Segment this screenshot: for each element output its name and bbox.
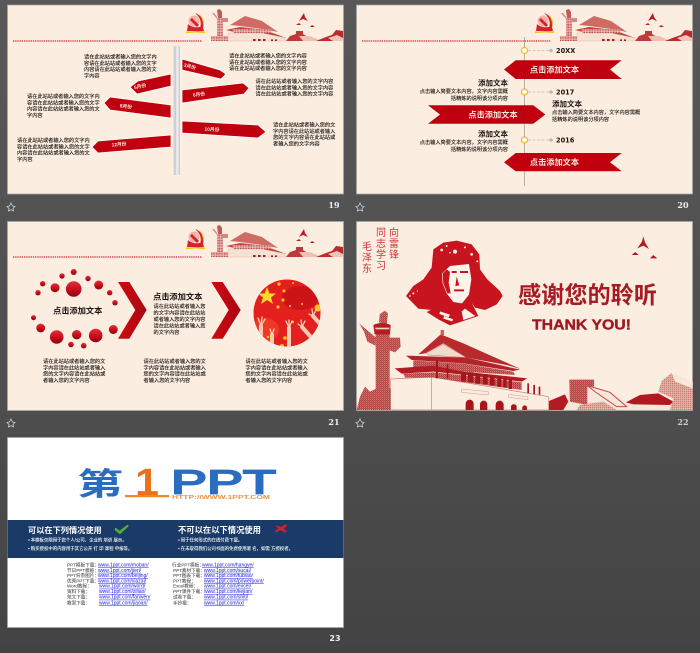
- text block: lower right: 请在此站站或者输入您的文: [273, 120, 336, 128]
- text block: right: 点击输入简要文本内容，文字内容需概: [552, 108, 640, 116]
- text block: lower left: 容请在此站站或者输入您的文字: [17, 142, 90, 150]
- sign: May: [130, 74, 171, 94]
- thank you title: 感谢您的聆听: [518, 282, 657, 308]
- links column left: [67, 562, 151, 606]
- bottom text block 1: 请在此站站或者输入您的文: [43, 357, 106, 365]
- bottom text block 3: [246, 357, 309, 384]
- slide 22 page number: 22: [677, 417, 689, 427]
- text block: left upper: [420, 78, 508, 102]
- links column right: www.1ppt.com/tubiao/: [204, 573, 254, 579]
- allowed list: [28, 536, 132, 552]
- text block: left lower: 点击输入简要文本内容，文字内容需概: [420, 138, 508, 146]
- milestone 2017: [522, 88, 575, 96]
- timeline axis: [524, 37, 526, 186]
- links column left: 教案下载：: [67, 599, 90, 606]
- links column right: www.1ppt.com/sucai/: [204, 568, 252, 574]
- text block: middle left: [27, 92, 100, 119]
- sign: August: 8月份: [119, 102, 133, 111]
- links column right: www.1ppt.com/hangye/: [202, 562, 254, 568]
- sign: December: [92, 135, 171, 153]
- slide 22 page number: [356, 417, 689, 427]
- ring caption: 点击添加文本: [53, 306, 102, 316]
- forbidden heading: 不可以在以下情况使用: [178, 525, 261, 535]
- links column right: www.1ppt.com/kejian/: [204, 589, 253, 595]
- middle text block: 的文字内容: [154, 328, 179, 336]
- links column right: www.1ppt.com/powerpoint/: [204, 578, 264, 584]
- text block: middle left: 内容请在此站站或者输入您的文: [27, 105, 100, 113]
- ribbon 3: [504, 153, 622, 171]
- links column left: Word教程：: [67, 583, 92, 590]
- links column right: [172, 562, 264, 606]
- text block: lower right: 字内容请在此站站或者输入: [273, 127, 335, 135]
- text block: left lower: 括精炼的说明该分项内容: [451, 145, 508, 153]
- allowed heading: 可以在下列情况使用: [28, 525, 102, 535]
- calligraphy: 东: [362, 262, 372, 275]
- text block: lower left: 请在此站站或者输入您的文字内: [17, 136, 90, 144]
- dotted circle ring: [31, 269, 118, 349]
- header banner: [13, 9, 343, 41]
- links column right: PPT课件下载：: [173, 588, 205, 595]
- sign: March: 3月份: [183, 62, 197, 71]
- text block: right: [552, 98, 640, 123]
- slide 23: usage terms: [8, 438, 344, 628]
- milestone 2016: [522, 136, 575, 144]
- middle text block: [154, 302, 205, 336]
- text block: upper right: 请在此站站或者输入您的文字内容: [229, 58, 307, 66]
- calligraphy: [362, 226, 399, 275]
- middle heading: 点击添加文本: [153, 292, 202, 302]
- logo: 1: [135, 462, 159, 504]
- slide 19: signpost: [8, 5, 344, 194]
- text block: upper left: 请在此站站或者输入您的文字内: [84, 52, 157, 60]
- bottom text block 3: 您的文字内容请在此站站或: [246, 370, 308, 378]
- text block: middle right: 请在此站站或者输入您的文字内容: [256, 77, 333, 85]
- birds: [632, 236, 657, 258]
- sign: October: [182, 121, 266, 138]
- text block: upper right: 请在此站站或者输入您的文字内容: [229, 52, 307, 60]
- middle text block: 请在此站站或者输入您: [154, 302, 205, 310]
- middle text block: 请在此站站或者输入您: [154, 322, 205, 330]
- links column left: www.1ppt.com/moban/: [98, 562, 149, 568]
- links column left: www.1ppt.com/ziliao/: [99, 589, 146, 595]
- bottom text block 2: 者输入您的文字内容: [144, 376, 190, 384]
- text block: left upper: 添加文本: [478, 78, 508, 88]
- text block: middle right: [256, 77, 333, 98]
- links column left: www.1ppt.com/xiazai/: [98, 578, 147, 584]
- slide 20: timeline: [356, 5, 692, 194]
- flag photo circle: [251, 279, 322, 348]
- milestone 2017: 2017: [556, 88, 575, 96]
- slide 23 page number: 23: [329, 634, 341, 643]
- bottom text block 3: 者输入您的文字内容: [246, 376, 292, 384]
- navy band: [8, 520, 344, 558]
- logo: [77, 462, 276, 504]
- bottom text block 1: 字内容请在此站站或者输入: [43, 363, 105, 371]
- links column right: PPT教程：: [173, 577, 196, 584]
- links column left: PPT模板下载：: [67, 562, 99, 568]
- bottom text block 2: [144, 357, 207, 384]
- links column right: Excel教程：: [173, 583, 198, 590]
- text block: lower right: 者输入您的文字内容: [273, 139, 320, 147]
- slide 21 page number: 21: [328, 417, 340, 427]
- sign: March: [182, 59, 226, 79]
- links column left: 范文下载：: [67, 594, 90, 601]
- signpost pole: [173, 46, 180, 175]
- links column right: 手抄报：: [173, 599, 191, 606]
- text block: right: 添加文本: [552, 98, 582, 108]
- text block: upper left: 内容请在此站站或者输入您的文: [84, 65, 157, 73]
- logo: 第: [77, 467, 123, 502]
- thank you subtitle: THANK YOU!: [532, 318, 631, 334]
- text block: lower left: [17, 136, 90, 163]
- slide 20 page number: 20: [677, 200, 689, 210]
- links column right: 试卷下载：: [173, 594, 196, 601]
- text block: middle right: 请在此站站或者输入您的文字内容: [256, 83, 333, 91]
- arrow: chevron 1: [118, 282, 147, 339]
- links column left: www.1ppt.com/beijing/: [98, 573, 148, 579]
- bottom text block 1: [43, 357, 106, 384]
- sign: August: [104, 97, 171, 118]
- milestone 20XX: 20XX: [556, 47, 575, 55]
- text block: middle right: 请在此站站或者输入您的文字内容: [256, 90, 333, 98]
- portrait silhouette: [406, 241, 503, 325]
- text block: lower right: 您的文字内容请在此站站或: [273, 133, 335, 141]
- forbidden list: ▪ 在未取得我们公司书面的免费使用署 名，如需 方授权者。: [178, 545, 293, 552]
- allowed list: ▪ 本模板仅限用于您个人/公司、企业的 培训 展示。: [28, 536, 127, 544]
- calligraphy: 锋: [389, 248, 399, 261]
- calligraphy: 毛: [362, 241, 372, 253]
- middle text block: 或者输入您的文字内容: [154, 315, 205, 323]
- text block: upper left: 字内容: [84, 71, 100, 79]
- calligraphy: 同: [376, 227, 386, 239]
- bottom text block 3: 请在此站站或者输入您的文: [246, 357, 309, 365]
- sign: May: 5月份: [133, 82, 147, 91]
- links column left: PPT背景图片：: [67, 572, 99, 579]
- header banner: [362, 9, 692, 41]
- calligraphy: 习: [376, 261, 386, 272]
- links column right: www.1ppt.com/xx/: [204, 600, 245, 606]
- great wall: [549, 372, 693, 410]
- middle text block: 的文字内容请在此站站: [154, 308, 205, 316]
- ribbon 1: [504, 60, 622, 79]
- text block: middle left: 字内容: [27, 111, 43, 119]
- links column right: www.1ppt.com/shiti/: [204, 595, 249, 601]
- calligraphy: 雷: [389, 238, 399, 250]
- text block: upper right: 请在此站站或者输入您的文字内容: [229, 64, 307, 72]
- slide 20 page number: [356, 200, 689, 211]
- text block: upper right: [229, 52, 307, 72]
- links column right: PPT素材下载：: [173, 567, 205, 574]
- bottom text block 1: 您的文字内容请在此站站或: [43, 370, 105, 378]
- milestone 20XX: [522, 47, 575, 55]
- text block: lower left: 字内容: [17, 155, 33, 163]
- bottom text block 1: 者输入您的文字内容: [43, 376, 90, 384]
- slide 19 page number: [7, 200, 340, 211]
- links column left: 资料下载：: [67, 588, 90, 595]
- sign: June: [182, 83, 249, 103]
- milestone 2016: 2016: [556, 136, 575, 144]
- calligraphy: 志: [376, 237, 386, 250]
- text block: lower left: 内容请在此站站或者输入您的文: [17, 149, 90, 157]
- header banner: [13, 225, 343, 257]
- icon: check: [115, 525, 128, 534]
- arrow: chevron 2: [211, 282, 241, 339]
- logo: HTTP://WWW.1PPT.COM: [172, 495, 271, 501]
- icon: cross: [275, 524, 287, 532]
- huabiao column: [357, 311, 416, 410]
- bottom text block 2: 请在此站站或者输入您的文: [144, 357, 207, 365]
- text block: right: 括精炼的说明该分项内容: [552, 115, 609, 123]
- links column right: www.1ppt.com/excel/: [204, 584, 252, 590]
- text block: upper left: 容请在此站站或者输入您的文字: [84, 59, 157, 67]
- sign: June: 6月份: [193, 90, 206, 99]
- links column left: www.1ppt.com/word/: [99, 584, 146, 590]
- text block: left lower: [420, 128, 508, 153]
- links column right: PPT图表下载：: [173, 572, 205, 579]
- bottom text block 3: 字内容请在此站站或者输入: [246, 363, 308, 371]
- text block: left lower: 添加文本: [478, 128, 508, 138]
- ribbon 2: 点击添加文本: [468, 110, 518, 120]
- sign: October: 10月份: [204, 126, 220, 133]
- slide 19 page number: 19: [328, 200, 340, 210]
- allowed list: ▪ 购买授权中的内容用于其它公开 打 印 课程 申报等。: [28, 545, 132, 552]
- forbidden list: ▪ 用于任何形式的在线付费下载。: [178, 536, 242, 544]
- ribbon 1: 点击添加文本: [530, 64, 579, 74]
- text block: left upper: 点击输入简要文本内容，文字内容需概: [420, 87, 508, 95]
- links column right: 行业PPT模板：: [172, 562, 204, 568]
- links column left: www.1ppt.com/jiaoan/: [99, 600, 148, 606]
- calligraphy: 学: [376, 248, 386, 261]
- slide 21 page number: [7, 417, 340, 427]
- bottom text block 2: 您的文字内容请在此站站或: [144, 370, 206, 378]
- forbidden list: [178, 536, 293, 552]
- links column left: 优秀PPT下载：: [67, 577, 99, 584]
- logo: PPT: [171, 464, 276, 502]
- slide 22: thank you: [356, 222, 693, 410]
- sign: December: 12月份: [111, 140, 127, 149]
- links column left: www.1ppt.com/fanwen/: [99, 595, 151, 601]
- text block: upper left: [84, 52, 157, 79]
- bottom text block 2: 字内容请在此站站或者输入: [144, 363, 206, 371]
- text block: middle left: 请在此站站或者输入您的文字内: [27, 92, 100, 100]
- calligraphy: 泽: [362, 252, 372, 264]
- text block: lower right: [273, 120, 336, 147]
- slide 21: process: [8, 222, 344, 410]
- tiananmen gate: [391, 330, 548, 410]
- text block: left upper: 括精炼的说明该分项内容: [451, 94, 508, 102]
- links column left: 节日PPT模板：: [67, 567, 99, 574]
- ribbon 3: 点击添加文本: [530, 157, 579, 167]
- links column left: www.1ppt.com/jieri/: [98, 568, 142, 574]
- calligraphy: 向: [389, 226, 399, 239]
- text block: middle left: 容请在此站站或者输入您的文字: [27, 98, 100, 106]
- ribbon 2: [428, 105, 545, 124]
